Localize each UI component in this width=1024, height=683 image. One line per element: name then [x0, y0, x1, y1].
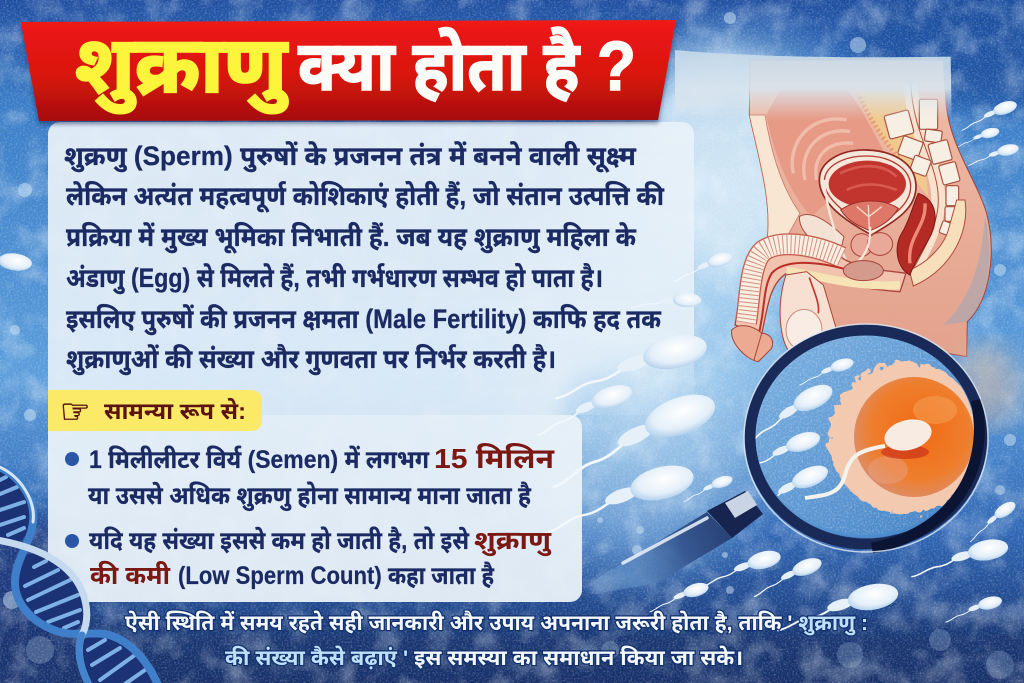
small sperm — [756, 384, 832, 439]
spine — [857, 83, 960, 270]
sperm swimming around the panels — [0, 98, 1022, 630]
magnifying glass with egg and sperm — [583, 324, 990, 595]
sacral tissue — [909, 200, 966, 286]
bullet 1: 1 मिलीलीटर विर्य (Semen) में लगभग — [89, 445, 430, 474]
egg corona — [829, 362, 981, 514]
icon: pointing hand: ☞ — [60, 392, 90, 432]
rectum — [897, 193, 935, 275]
panel: key points — [48, 415, 582, 602]
abdomen interior — [766, 90, 883, 217]
bladder — [819, 150, 916, 235]
body paragraph: प्रक्रिया में मुख्य भूमिका निभाती हैं. जब यह शुक्राणु महिला के — [66, 221, 637, 254]
closing note: ऐसी स्थिति में समय रहते सही जानकारी और उपाय अपनाना जरूरी होता है, ताकि ' शुक्राणु : — [125, 609, 868, 636]
seminal vesicle — [799, 215, 844, 250]
highlight: deficiency: की कमी — [90, 560, 171, 590]
prostate lobes — [851, 234, 872, 256]
body paragraph — [64, 140, 665, 375]
bullet 2: (Low Sperm Count) कहा जाता है — [178, 561, 495, 590]
bulb — [843, 261, 883, 281]
highlight: 15 million: 15 मिलिन — [434, 442, 555, 474]
banner shape — [21, 20, 676, 121]
illustration: male reproductive anatomy cross-section — [675, 50, 991, 362]
abdominal wall — [749, 115, 800, 243]
magnifier handle — [583, 491, 763, 595]
yellow tag: normally — [48, 390, 262, 432]
bullet 1 — [65, 442, 555, 511]
buttock shading — [943, 217, 990, 325]
bullet 1: या उससे अधिक शुक्रणु होना सामान्य माना जाता है — [88, 481, 532, 511]
scrotum and testis — [780, 272, 837, 355]
bullet 2: यदि यह संख्या इससे कम हो जाती है, तो इसे — [89, 526, 469, 555]
magnifier lens — [754, 334, 978, 538]
vas deferens — [824, 180, 870, 268]
magnifier rim — [750, 330, 982, 544]
penis — [732, 238, 906, 362]
tag label: सामन्या रूप से: — [104, 398, 246, 424]
closing note — [125, 609, 868, 671]
body paragraph: लेकिन अत्यंत महत्वपूर्ण कोशिकाएं होती हैं, जो संतान उत्पत्ति की — [66, 180, 665, 213]
bullet 2 — [65, 525, 552, 590]
mist over the upper body — [675, 50, 952, 120]
title: white words: क्या होता है ? — [298, 26, 636, 105]
granular haze beside the magnifier — [949, 343, 1021, 427]
body paragraph: शुक्राणुओं की संख्या और गुणवता पर निर्भर करती है। — [66, 343, 556, 375]
sperm reaching the egg — [805, 446, 885, 498]
highlight: sperm: शुक्राणु — [474, 525, 552, 556]
body paragraph: शुक्रणु (Sperm) पुरुषों के प्रजनन तंत्र में बनने वाली सूक्ष्म — [64, 140, 637, 173]
body paragraph: अंडाणु (Egg) से मिलते हैं, तभी गर्भधारण सम्भव हो पाता है। — [66, 262, 603, 294]
egg — [854, 377, 974, 497]
title banner — [21, 20, 676, 121]
closing note: की संख्या कैसे बढ़ाएं ' इस समस्या का समाधान किया जा सके। — [225, 644, 743, 671]
body paragraph: इसलिए पुरुषों की प्रजनन क्षमता (Male Fertility) काफि हद तक — [66, 304, 662, 335]
panel: description — [48, 122, 694, 415]
magnified view — [756, 336, 974, 535]
body silhouette — [749, 60, 991, 357]
title: yellow word: शुक्राणु — [75, 20, 288, 113]
DNA helix — [0, 466, 160, 683]
